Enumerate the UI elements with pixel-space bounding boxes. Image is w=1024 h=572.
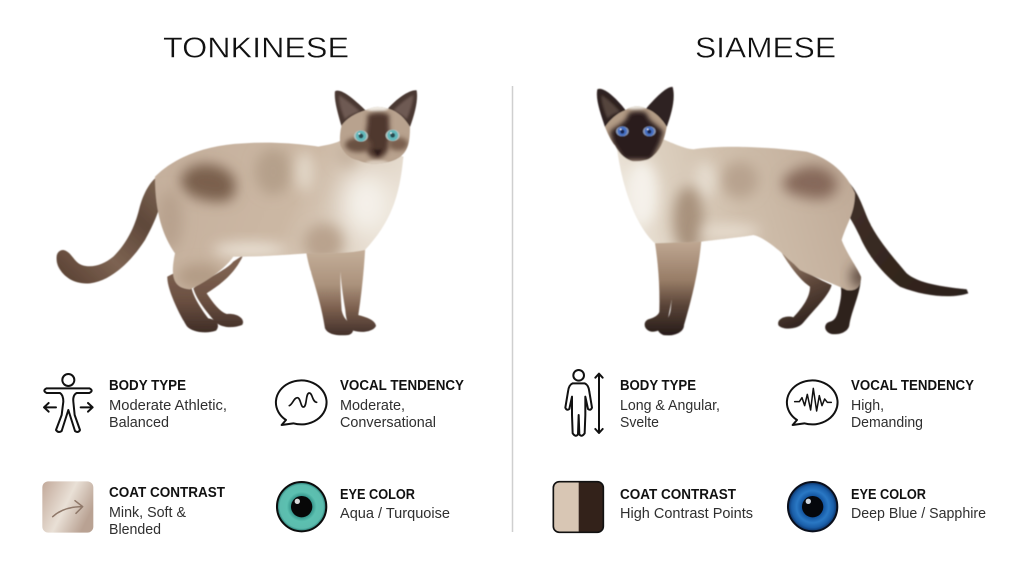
cat eyes — [354, 130, 400, 142]
trait: eye color — [340, 487, 450, 522]
title: Siamese: SIAMESE — [695, 32, 836, 64]
trait: eye color: Aqua / Turquoise — [340, 506, 450, 522]
cat head — [597, 87, 674, 161]
panel: Siamese traits — [553, 370, 986, 532]
trait: eye color: EYE COLOR — [340, 487, 415, 503]
trait: body type — [109, 378, 227, 431]
trait: body type: Balanced — [109, 415, 169, 431]
trait: coat contrast: COAT CONTRAST — [620, 487, 736, 503]
trait: vocal tendency: High, — [851, 398, 884, 414]
trait: body type: Long & Angular, — [620, 398, 720, 414]
cat eyes — [616, 126, 656, 136]
icon: body type long — [565, 370, 603, 436]
trait: vocal tendency: Conversational — [340, 415, 436, 431]
illustration: Siamese cat — [597, 87, 968, 335]
trait: body type: Svelte — [620, 415, 659, 431]
trait: coat contrast — [620, 487, 753, 522]
icon: coat swatch high contrast — [553, 482, 603, 532]
icon: aqua eye — [277, 482, 326, 531]
trait: vocal tendency: VOCAL TENDENCY — [340, 378, 464, 394]
trait: vocal tendency — [340, 378, 464, 431]
trait: coat contrast — [109, 485, 225, 538]
trait: vocal tendency — [851, 378, 974, 431]
trait: eye color: Deep Blue / Sapphire — [851, 506, 986, 522]
icon: coat swatch blended — [42, 481, 93, 533]
icon: speech bubble moderate — [276, 380, 327, 425]
icon: speech bubble high — [787, 380, 838, 425]
cat head — [335, 90, 417, 166]
trait: body type: BODY TYPE — [109, 378, 186, 394]
icon: body type moderate — [44, 374, 93, 432]
trait: body type — [620, 378, 720, 431]
trait: body type: Moderate Athletic, — [109, 398, 227, 414]
trait: coat contrast: Mink, Soft & — [109, 505, 186, 521]
trait: body type: BODY TYPE — [620, 378, 696, 394]
trait: coat contrast: COAT CONTRAST — [109, 485, 225, 501]
illustration: Tonkinese cat — [56, 90, 417, 335]
panel: Tonkinese traits — [42, 374, 464, 538]
trait: eye color: EYE COLOR — [851, 487, 926, 503]
icon: blue eye — [788, 482, 837, 531]
trait: eye color — [851, 487, 986, 522]
trait: coat contrast: Blended — [109, 522, 161, 538]
trait: vocal tendency: Moderate, — [340, 398, 405, 414]
trait: coat contrast: High Contrast Points — [620, 506, 753, 522]
trait: vocal tendency: Demanding — [851, 415, 923, 431]
trait: vocal tendency: VOCAL TENDENCY — [851, 378, 974, 394]
title: Tonkinese: TONKINESE — [163, 32, 349, 64]
